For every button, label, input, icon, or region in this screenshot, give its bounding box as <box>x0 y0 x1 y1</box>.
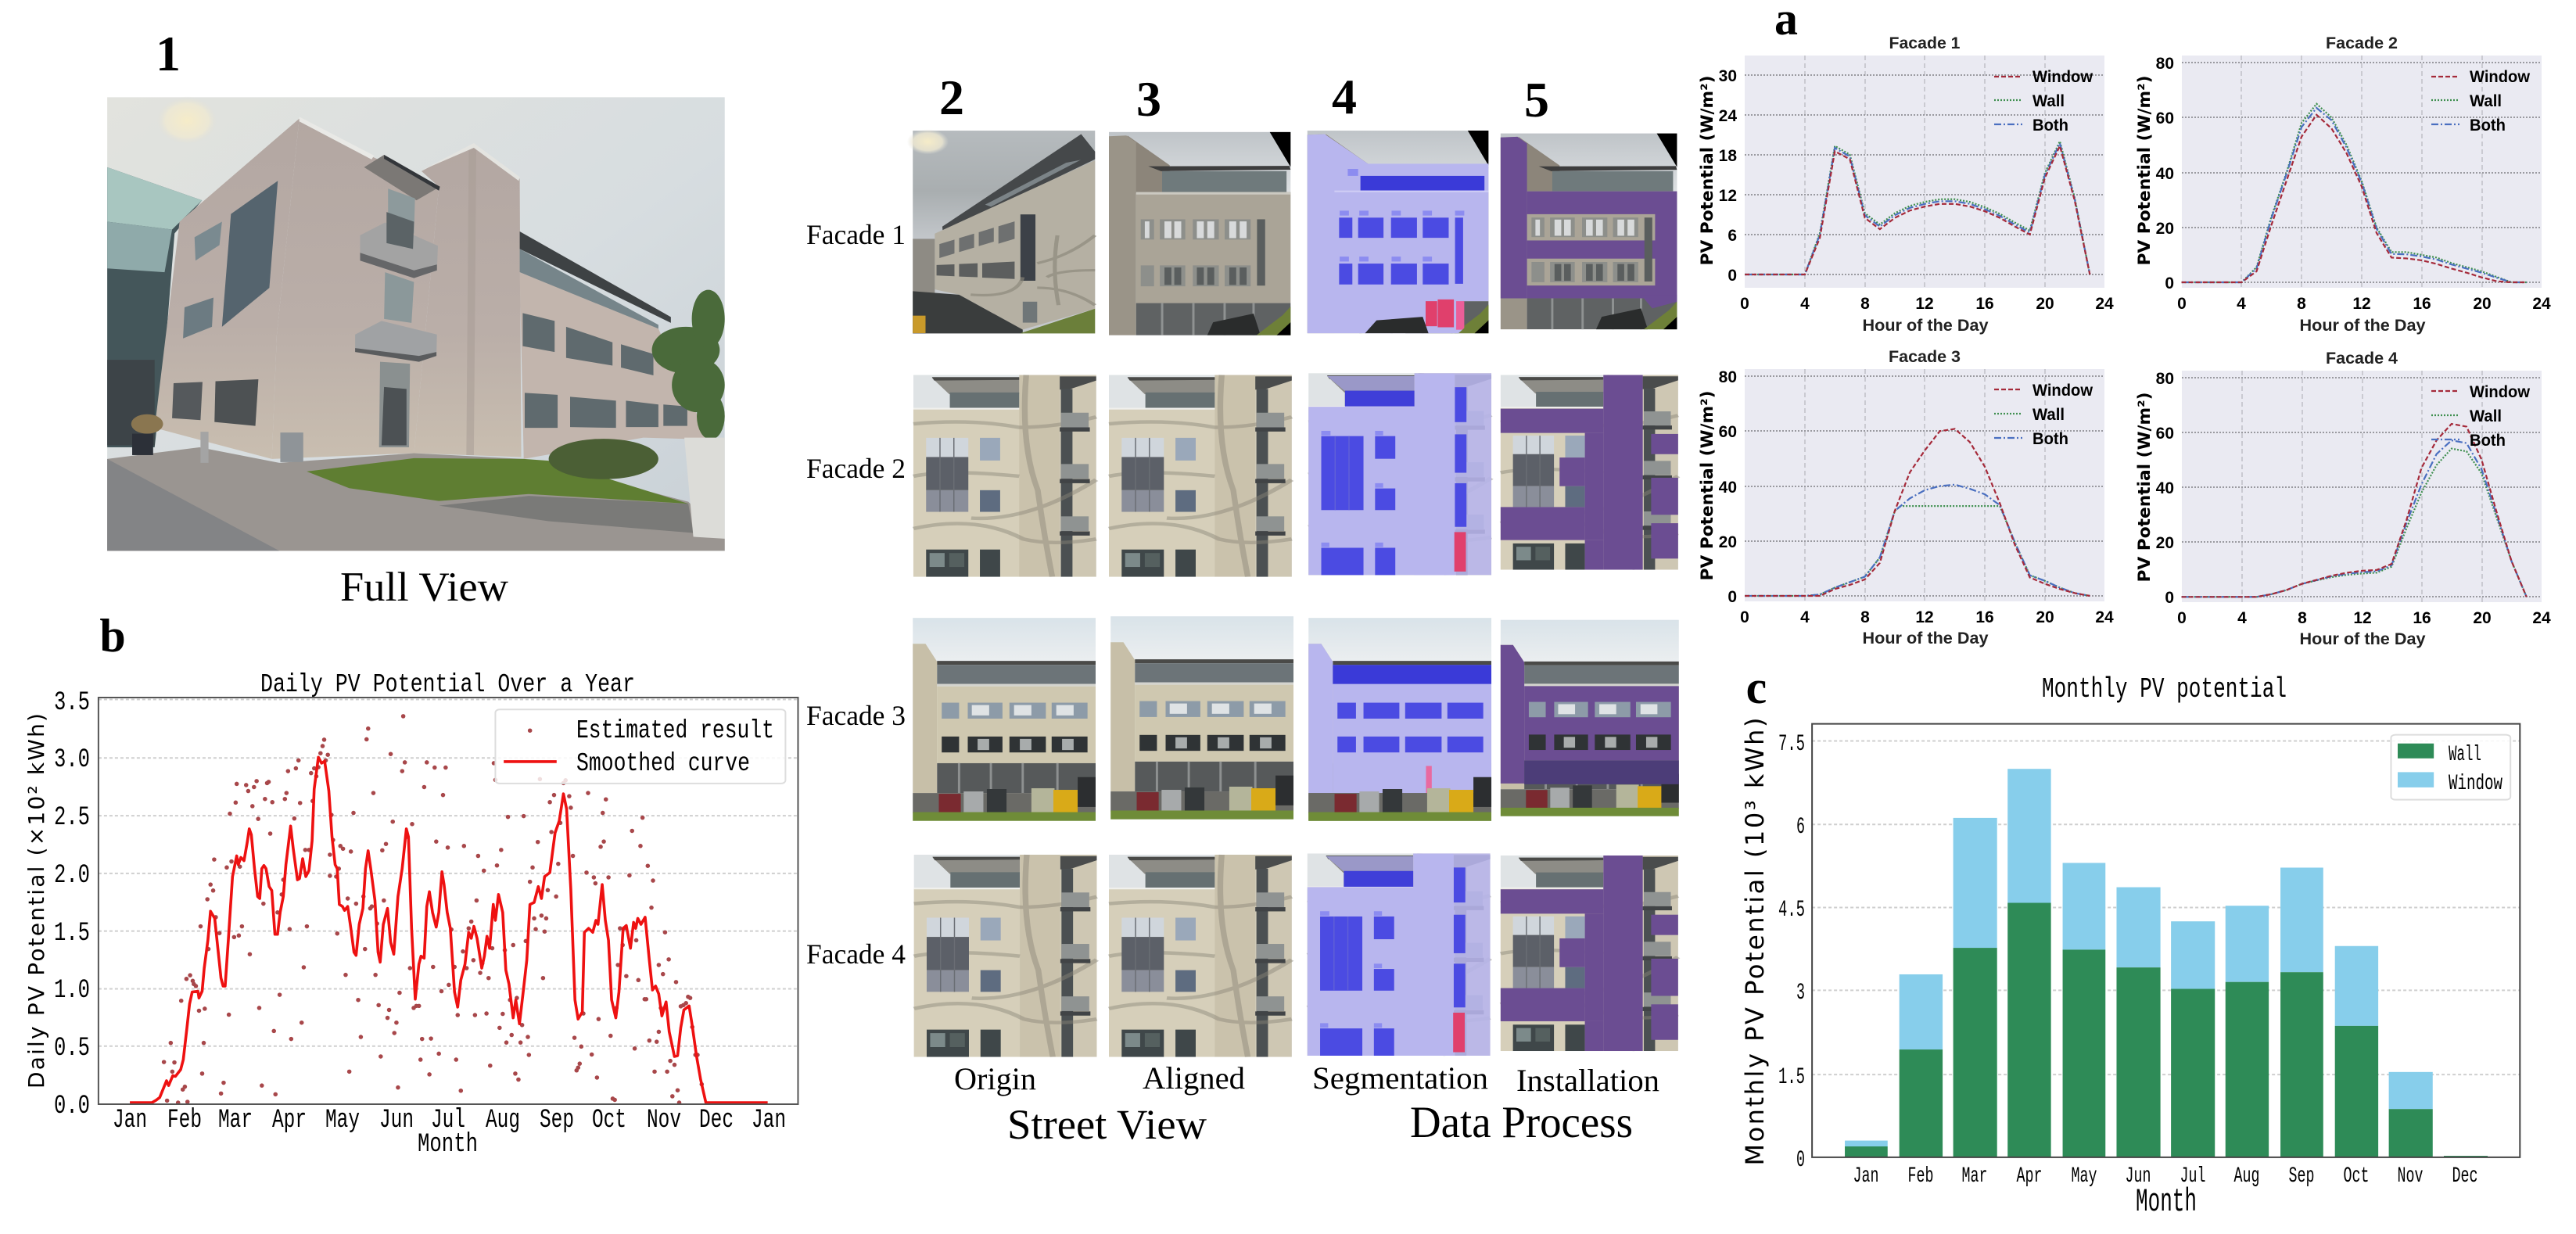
chart a2: facade 2: 24 <box>2532 295 2551 313</box>
chart c: monthly PV potential stacked bars: 3 <box>1796 980 1805 1006</box>
chart a4: facade 4: 20 <box>2473 609 2492 627</box>
label: panel number 1: 1 <box>156 26 181 81</box>
chart a3: facade 3: 0 <box>1740 608 1749 626</box>
row: facade 1 images <box>907 129 1677 335</box>
chart c: monthly PV potential stacked bars: 4.5 <box>1778 897 1805 924</box>
chart a3: facade 3: Facade 3 <box>1889 348 1961 366</box>
photo: full view of the building <box>107 96 725 551</box>
chart c: monthly PV potential stacked bars: 7.5 <box>1778 731 1805 758</box>
chart b: daily PV potential over a year: Apr <box>272 1106 307 1135</box>
chart a1: facade 1: Both <box>2032 117 2068 135</box>
chart a4: facade 4: PV Potential (W/m²) <box>2135 393 2154 582</box>
chart a3: facade 3: Wall <box>2032 406 2065 424</box>
chart a3: facade 3: 0 <box>1727 588 1737 606</box>
chart a1: facade 1: 24 <box>2095 295 2114 313</box>
chart a3: facade 3: 24 <box>2095 608 2114 626</box>
label: column numbers: 4 <box>1332 69 1357 124</box>
scatter: estimated result <box>164 716 701 1103</box>
row: facade 2 images <box>913 373 1678 577</box>
chart b: daily PV potential over a year: Sep <box>540 1106 574 1135</box>
chart a3: facade 3: PV Potential (W/m²) <box>1698 391 1717 580</box>
chart a3: facade 3: 16 <box>1975 608 1994 626</box>
chart a4: facade 4: 20 <box>2156 534 2174 552</box>
labels: column captions: Origin <box>954 1061 1036 1096</box>
chart a2: facade 2: 80 <box>2156 55 2174 73</box>
chart a4: facade 4: Hour of the Day <box>2299 630 2426 648</box>
chart b: daily PV potential over a year: 2.0 <box>54 861 90 891</box>
chart a2: facade 2: 20 <box>2473 295 2492 313</box>
chart a3: facade 3: 40 <box>1719 479 1737 497</box>
chart a3: facade 3: 12 <box>1915 608 1934 626</box>
chart a1: facade 1: 6 <box>1727 227 1737 245</box>
chart a4: facade 4: 12 <box>2353 609 2372 627</box>
chart a3: facade 3: Hour of the Day <box>1863 630 1989 647</box>
chart a2: facade 2: 20 <box>2156 220 2174 238</box>
chart b: daily PV potential over a year: Jan <box>752 1106 786 1135</box>
chart a2: facade 2: 16 <box>2413 295 2431 313</box>
label: column numbers: 5 <box>1524 72 1549 127</box>
chart a4: facade 4: 24 <box>2532 609 2551 627</box>
chart a1: facade 1: Facade 1 <box>1889 34 1961 52</box>
chart c: monthly PV potential stacked bars: Jun <box>2126 1164 2151 1189</box>
chart b: daily PV potential over a year: Daily PV Potential Over a Year <box>260 670 635 699</box>
chart a2: facade 2: 60 <box>2156 109 2174 127</box>
labels: facade row names: Facade 4 <box>806 938 906 970</box>
labels: column captions: Aligned <box>1143 1060 1245 1096</box>
chart a1: facade 1: 30 <box>1719 67 1737 85</box>
row: facade 3 images <box>913 616 1679 821</box>
chart a2: facade 2: Wall <box>2470 92 2502 110</box>
chart a2: facade 2: 0 <box>2165 274 2174 292</box>
chart b: daily PV potential over a year: Aug <box>486 1106 520 1135</box>
chart c: monthly PV potential stacked bars: 6 <box>1796 814 1805 841</box>
chart b: daily PV potential over a year: 2.5 <box>54 803 90 833</box>
chart a3: facade 3: 60 <box>1719 423 1737 441</box>
chart a3: facade 3: 20 <box>2036 608 2054 626</box>
chart a2: facade 2: Both <box>2470 117 2506 135</box>
chart c: monthly PV potential stacked bars: Monthly PV potential <box>2042 673 2287 705</box>
chart a2: facade 2: 40 <box>2156 165 2174 183</box>
chart a3: facade 3: Window <box>2032 382 2093 400</box>
chart a3: facade 3: 8 <box>1860 608 1870 626</box>
chart c: monthly PV potential stacked bars: 1.5 <box>1778 1064 1805 1091</box>
bars: wall share <box>1845 903 2488 1157</box>
labels: column captions <box>954 1060 1659 1098</box>
chart a4: facade 4: 0 <box>2165 589 2174 607</box>
row: facade 4 images <box>914 853 1678 1057</box>
labels: facade row names: Facade 2 <box>806 453 906 484</box>
chart a1: facade 1: 12 <box>1915 295 1934 313</box>
chart a3: facade 3: 80 <box>1719 368 1737 386</box>
chart b: daily PV potential over a year <box>23 670 798 1160</box>
chart a2: facade 2: Hour of the Day <box>2299 317 2426 335</box>
label: panel b: b <box>99 610 126 662</box>
chart c: monthly PV potential stacked bars: Jul <box>2180 1164 2205 1189</box>
chart b: daily PV potential over a year: May <box>325 1106 360 1135</box>
chart b: daily PV potential over a year: 0.5 <box>54 1034 90 1064</box>
chart a2: facade 2: 8 <box>2297 295 2306 313</box>
chart c: monthly PV potential stacked bars <box>1740 673 2520 1221</box>
chart c: monthly PV potential stacked bars: Feb <box>1908 1164 1933 1189</box>
chart a4: facade 4: Wall <box>2470 407 2502 425</box>
chart a4: facade 4: 80 <box>2156 370 2174 388</box>
chart a2: facade 2: 4 <box>2237 295 2246 313</box>
chart b: daily PV potential over a year: Daily PV Potential (×10² kWh) <box>23 713 49 1089</box>
chart a1: facade 1: 18 <box>1719 147 1737 165</box>
heading: street view: Street View <box>1007 1101 1207 1148</box>
chart b: daily PV potential over a year: Oct <box>592 1106 626 1135</box>
chart c: monthly PV potential stacked bars: Apr <box>2016 1164 2043 1189</box>
chart c: monthly PV potential stacked bars: Dec <box>2452 1164 2477 1189</box>
chart a3: facade 3: 20 <box>1719 533 1737 551</box>
chart c: monthly PV potential stacked bars: Mar <box>1961 1164 1988 1189</box>
chart a3: facade 3: Both <box>2032 430 2068 448</box>
chart b: daily PV potential over a year: 0.0 <box>54 1092 90 1121</box>
chart b: daily PV potential over a year: Jul <box>431 1106 465 1135</box>
chart a2: facade 2: 12 <box>2352 295 2371 313</box>
bars: window share <box>1845 769 2433 1146</box>
chart b: daily PV potential over a year: Feb <box>167 1106 202 1135</box>
chart b: daily PV potential over a year: 1.0 <box>54 976 90 1006</box>
legend: wall and window <box>2391 735 2510 800</box>
label: panel c: c <box>1746 662 1767 713</box>
chart a3: facade 3: 4 <box>1800 608 1810 626</box>
chart a1: facade 1: 0 <box>1727 267 1737 285</box>
chart a1: facade 1 <box>1698 34 2114 335</box>
labels: facade row names: Facade 3 <box>806 700 906 731</box>
chart a2: facade 2: Window <box>2470 68 2531 86</box>
chart b: daily PV potential over a year: 1.5 <box>54 919 90 949</box>
labels: column captions: Installation <box>1516 1063 1659 1098</box>
label: column numbers: 2 <box>939 70 964 125</box>
chart a2: facade 2: 0 <box>2177 295 2187 313</box>
chart c: monthly PV potential stacked bars: Wall <box>2449 743 2481 767</box>
chart c: monthly PV potential stacked bars: Nov <box>2398 1164 2423 1189</box>
legend: scatter and curve <box>495 709 785 784</box>
chart c: monthly PV potential stacked bars: Monthly PV Potential (10³ kWh) <box>1740 718 1770 1165</box>
line: smoothed curve <box>130 757 768 1103</box>
chart a2: facade 2: PV Potential (W/m²) <box>2135 76 2154 265</box>
chart c: monthly PV potential stacked bars: Window <box>2449 772 2502 796</box>
chart a1: facade 1: Wall <box>2032 92 2065 110</box>
chart a1: facade 1: 20 <box>2036 295 2054 313</box>
chart b: daily PV potential over a year: Dec <box>699 1106 734 1135</box>
chart b: daily PV potential over a year: Jan <box>113 1106 147 1135</box>
chart c: monthly PV potential stacked bars: May <box>2071 1164 2097 1189</box>
labels: column captions: Segmentation <box>1312 1060 1488 1096</box>
chart c: monthly PV potential stacked bars: Aug <box>2233 1164 2260 1189</box>
chart a4: facade 4: Window <box>2470 383 2531 401</box>
caption: full view: Full View <box>340 565 509 610</box>
chart b: daily PV potential over a year: 3.0 <box>54 745 90 775</box>
chart a1: facade 1: PV Potential (W/m²) <box>1698 76 1717 265</box>
chart a4: facade 4: 16 <box>2413 609 2431 627</box>
chart b: daily PV potential over a year: 3.5 <box>54 688 90 718</box>
labels: facade row names <box>806 219 906 970</box>
chart b: daily PV potential over a year: Jun <box>379 1106 414 1135</box>
chart a1: facade 1: 0 <box>1740 295 1749 313</box>
chart a4: facade 4: Both <box>2470 432 2506 450</box>
chart c: monthly PV potential stacked bars: Oct <box>2343 1164 2370 1189</box>
label: column numbers <box>939 69 1549 127</box>
chart a1: facade 1: 24 <box>1719 107 1737 125</box>
chart c: monthly PV potential stacked bars: Jan <box>1853 1164 1878 1189</box>
chart a2: facade 2: Facade 2 <box>2326 34 2398 52</box>
chart c: monthly PV potential stacked bars: Month <box>2136 1183 2197 1221</box>
chart a4: facade 4: Facade 4 <box>2326 350 2398 368</box>
chart a1: facade 1: 16 <box>1975 295 1994 313</box>
chart c: monthly PV potential stacked bars: 0 <box>1796 1147 1805 1174</box>
chart a4: facade 4 <box>2135 350 2551 648</box>
chart a1: facade 1: 12 <box>1719 187 1737 205</box>
chart c: monthly PV potential stacked bars: Sep <box>2288 1164 2315 1189</box>
chart a1: facade 1: Hour of the Day <box>1863 317 1989 335</box>
chart b: daily PV potential over a year: Month <box>418 1130 478 1160</box>
chart a4: facade 4: 0 <box>2177 609 2187 627</box>
chart a1: facade 1: 4 <box>1800 295 1810 313</box>
chart b: daily PV potential over a year: Smoothed curve <box>576 749 750 778</box>
chart a2: facade 2 <box>2135 34 2551 335</box>
chart a4: facade 4: 40 <box>2156 479 2174 497</box>
chart a4: facade 4: 8 <box>2298 609 2307 627</box>
chart b: daily PV potential over a year: Estimated result <box>576 716 774 745</box>
chart b: daily PV potential over a year: Nov <box>647 1106 681 1135</box>
labels: facade row names: Facade 1 <box>806 219 906 250</box>
chart a4: facade 4: 60 <box>2156 425 2174 443</box>
chart a3: facade 3 <box>1698 348 2114 647</box>
chart a1: facade 1: Window <box>2032 68 2093 86</box>
chart a1: facade 1: 8 <box>1860 295 1870 313</box>
heading: data process: Data Process <box>1410 1098 1633 1147</box>
chart b: daily PV potential over a year: Mar <box>218 1106 253 1135</box>
chart a4: facade 4: 4 <box>2237 609 2247 627</box>
label: column numbers: 3 <box>1136 71 1161 127</box>
